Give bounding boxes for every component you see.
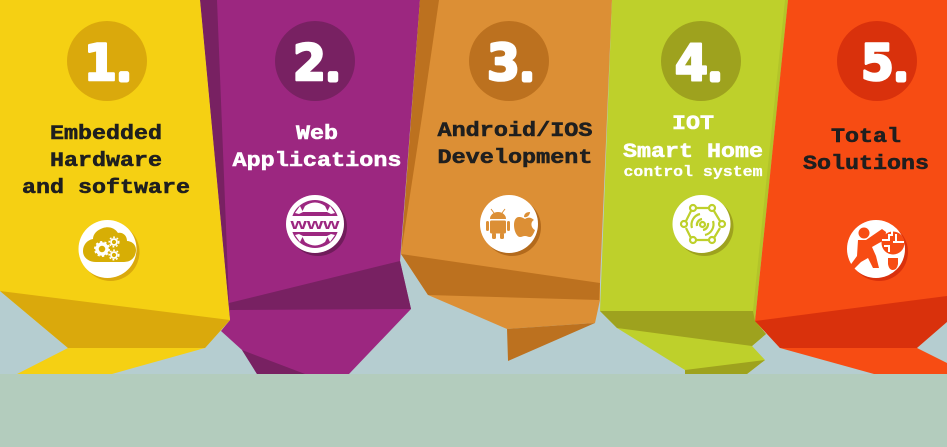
heading: android ios development	[438, 120, 592, 170]
number badge 1: 1.	[84, 35, 130, 92]
number badge 2: 2.	[293, 35, 339, 92]
number badge 2	[275, 21, 355, 101]
ground band	[0, 374, 947, 447]
heading: android ios development: Android/IOS	[438, 120, 592, 143]
number badge 5: 5.	[861, 35, 907, 92]
heading: total solutions: Solutions	[803, 153, 929, 176]
icon: iot network	[672, 195, 734, 256]
heading: embedded hardware and software	[22, 123, 190, 200]
panel: 3 android ios development	[401, 0, 612, 361]
heading: embedded hardware and software: Hardware	[50, 150, 162, 173]
icon: cloud with gears	[78, 220, 140, 281]
panel: 1 embedded hardware and software	[0, 0, 230, 374]
icon: person building puzzle bulb	[847, 220, 908, 281]
heading: total solutions	[803, 126, 929, 176]
heading: web applications: Applications	[232, 150, 402, 173]
panel: 5 total solutions	[755, 0, 947, 374]
heading: iot smart home control system: Smart Home	[623, 141, 763, 164]
icon: www globe: www	[289, 216, 340, 233]
number badge 5	[837, 21, 917, 101]
heading: android ios development: Development	[438, 147, 592, 170]
icon: www globe	[286, 195, 347, 256]
panel: 4 iot smart home	[600, 0, 788, 374]
heading: iot smart home control system: control system	[624, 165, 763, 181]
number badge 3	[469, 21, 549, 101]
heading: embedded hardware and software: and software	[22, 177, 190, 200]
number badge 3: 3.	[487, 35, 533, 92]
heading: iot smart home control system: IOT	[672, 113, 714, 136]
heading: total solutions: Total	[831, 126, 901, 149]
number badge 1	[67, 21, 147, 101]
heading: embedded hardware and software: Embedded	[50, 123, 162, 146]
heading: web applications	[232, 123, 402, 173]
number badge 4	[661, 21, 741, 101]
icon: android and apple	[480, 195, 541, 256]
panel: 2 web applications	[200, 0, 420, 374]
heading: iot smart home control system	[623, 113, 763, 181]
heading: web applications: Web	[296, 123, 338, 146]
number badge 4: 4.	[675, 35, 721, 92]
